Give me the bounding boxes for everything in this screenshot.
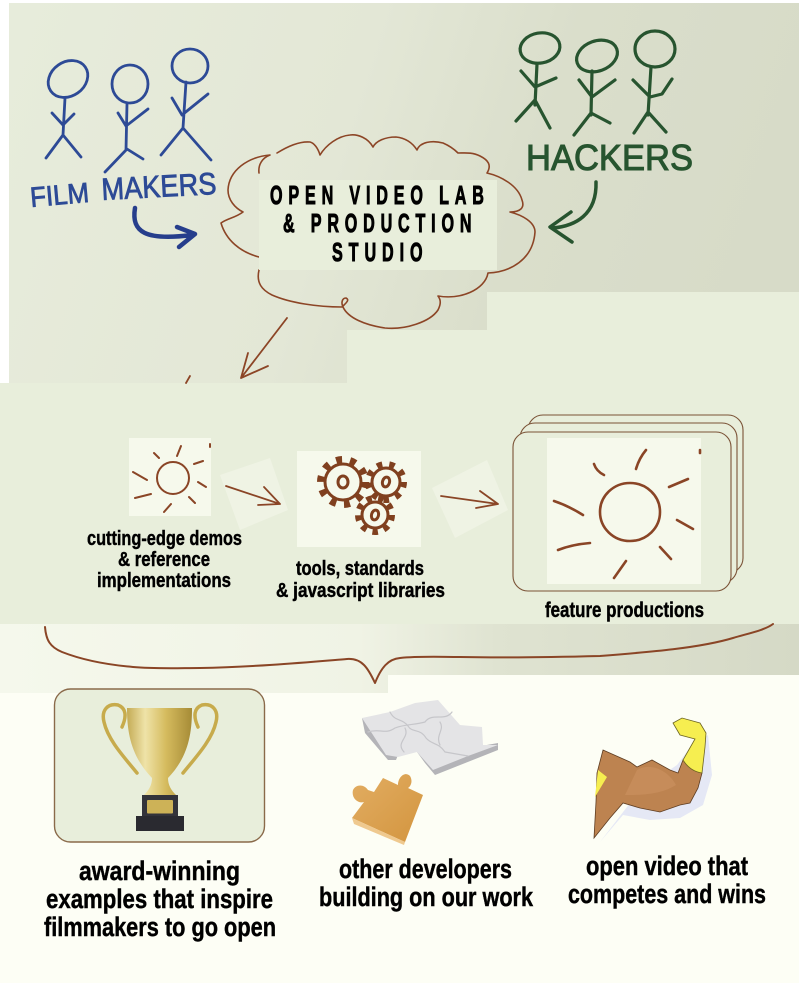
panel: tools and libraries [276, 451, 445, 602]
label: cutting-edge demos [87, 528, 242, 592]
arm shadow [600, 735, 712, 842]
label: award-winning examples [44, 856, 276, 942]
icon: gold trophy [103, 705, 217, 831]
label: tools, standards & javascript libraries: tools, standards [296, 558, 424, 580]
label: other developers: building on our work [319, 882, 534, 912]
label: open video that competes and wins [568, 851, 766, 909]
label: award-winning examples: examples that inspire [46, 884, 273, 914]
label: hackers: HACKERS [526, 137, 693, 178]
title: open video lab & production studio [270, 180, 484, 267]
label: feature productions: feature productions [545, 599, 704, 622]
icon: jigsaw puzzle pieces [352, 700, 498, 845]
photo paper background [9, 3, 799, 383]
bicep highlight [625, 767, 676, 795]
label: film makers: MAKERS [101, 166, 217, 207]
title: open video lab & production studio: & PRODUCTION [283, 208, 471, 238]
orange puzzle piece [352, 774, 423, 845]
sketch: gears [297, 451, 421, 547]
arrow: tools to features [432, 460, 508, 538]
arrow: demos to tools [220, 458, 288, 530]
yellow forearm sleeve and fist [673, 718, 706, 773]
label: film makers: FILM [29, 177, 90, 213]
lower paper strip [0, 624, 799, 693]
label: film makers [29, 166, 217, 213]
label: cutting-edge demos: implementations [97, 570, 231, 592]
label: cutting-edge demos: & reference [118, 549, 210, 571]
panel: cutting-edge demos [87, 438, 242, 592]
label: other developers [319, 854, 534, 912]
cream bottom panel [0, 675, 799, 983]
pale green band panel [0, 292, 799, 624]
hackers group [516, 30, 693, 242]
film makers group [29, 49, 217, 247]
arrow: hackers to cloud [550, 182, 596, 242]
label: open video that competes and wins: open video that [586, 851, 748, 881]
sketch: sun [129, 438, 211, 516]
silver puzzle slab [362, 700, 498, 775]
rounded card [54, 689, 264, 842]
label: tools, standards & javascript libraries [276, 558, 445, 602]
title: open video lab & production studio: STUDIO [332, 237, 423, 267]
label: other developers: other developers [339, 854, 512, 884]
stacked cards [513, 415, 743, 591]
panel: feature productions [513, 415, 743, 622]
yellow shoulder patch [595, 770, 607, 797]
icon: flexed muscle arm [594, 718, 712, 842]
cloud title box [259, 180, 497, 270]
arrow: film makers to cloud [134, 208, 195, 247]
panel: award-winning examples [54, 689, 264, 842]
sketch: large sun [547, 438, 701, 584]
title: open video lab & production studio: OPEN VIDEO LAB [270, 180, 484, 210]
upper arm [594, 750, 702, 838]
label: award-winning examples: filmmakers to go open [44, 912, 276, 942]
arrow: cloud to band [186, 318, 287, 383]
label: award-winning examples: award-winning [79, 856, 240, 886]
cloud outline [221, 135, 535, 328]
stick figures: film makers [41, 49, 211, 172]
label: cutting-edge demos: cutting-edge demos [87, 528, 242, 550]
brace [45, 624, 773, 683]
label: tools, standards & javascript libraries: & javascript libraries [276, 580, 445, 602]
stick figures: hackers [516, 30, 675, 135]
